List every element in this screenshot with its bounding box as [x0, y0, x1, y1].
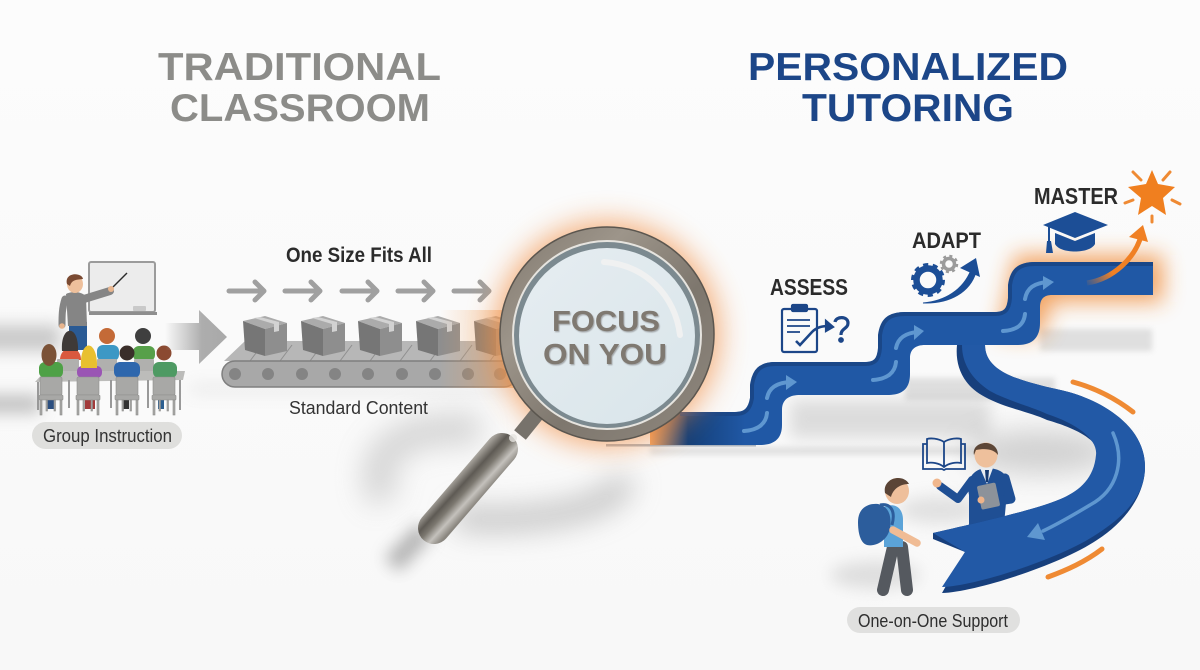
- icon: clipboard with question: [782, 305, 848, 352]
- panel: one-on-one tutoring figures: [858, 438, 1011, 590]
- step: assess: [770, 274, 848, 352]
- step: master: MASTER: [1034, 183, 1118, 209]
- whiteboard: [89, 262, 157, 315]
- chairs: [39, 377, 176, 415]
- icon: graduation cap: [1043, 212, 1108, 253]
- title: traditional classroom: [158, 46, 441, 130]
- teacher: [59, 273, 127, 350]
- magnifying glass: [434, 221, 720, 528]
- conveyor belt: [222, 341, 520, 387]
- lens highlight: [604, 262, 680, 335]
- boxes on conveyor: [243, 310, 520, 388]
- road: stepped personalized path: [606, 255, 1163, 446]
- lens: [519, 248, 695, 424]
- arrow: classroom to conveyor: [165, 310, 227, 364]
- panel: group instruction classroom: [35, 262, 185, 415]
- back row chairs: [57, 359, 154, 372]
- heading: one size fits all: One Size Fits All: [286, 244, 432, 267]
- title: personalized tutoring: TUTORING: [802, 87, 1014, 130]
- arrows: flow row: [229, 282, 489, 300]
- soft floor shadows: [0, 325, 1152, 589]
- focus on you: ON YOU: [543, 339, 667, 371]
- focus on you: FOCUS: [552, 306, 660, 338]
- step: adapt: ADAPT: [912, 228, 982, 253]
- label: group instruction: Group Instruction: [43, 426, 172, 446]
- title: traditional classroom: TRADITIONAL: [158, 46, 441, 89]
- title: personalized tutoring: [748, 46, 1068, 130]
- ring: [500, 227, 714, 441]
- step: adapt: [912, 228, 982, 303]
- label: one-on-one support: One-on-One Support: [858, 610, 1008, 631]
- icon: open book: [923, 438, 965, 470]
- step: master: [1034, 170, 1180, 283]
- orange glow: [494, 221, 720, 447]
- icon: orange star with rays: [1125, 170, 1180, 222]
- label: standard content: Standard Content: [289, 397, 428, 418]
- road direction arrows: [744, 282, 1048, 431]
- handle: [434, 414, 537, 528]
- label: group instruction: [32, 422, 182, 449]
- student legs: [47, 398, 164, 409]
- desks: [35, 371, 185, 410]
- arrow: orange rise: [1087, 225, 1148, 283]
- focus on you: [543, 306, 667, 371]
- teacher figure: [932, 442, 1011, 535]
- students front row: [39, 344, 177, 378]
- road: swoop to one-on-one support: [933, 345, 1145, 593]
- title: personalized tutoring: PERSONALIZED: [748, 46, 1068, 89]
- step: assess: ASSESS: [770, 274, 848, 300]
- motion accents: [1048, 382, 1133, 577]
- title: traditional classroom: CLASSROOM: [170, 87, 430, 130]
- student figure: [858, 478, 917, 590]
- icon: gears and rising arrow: [913, 256, 980, 303]
- students back row: [60, 328, 155, 361]
